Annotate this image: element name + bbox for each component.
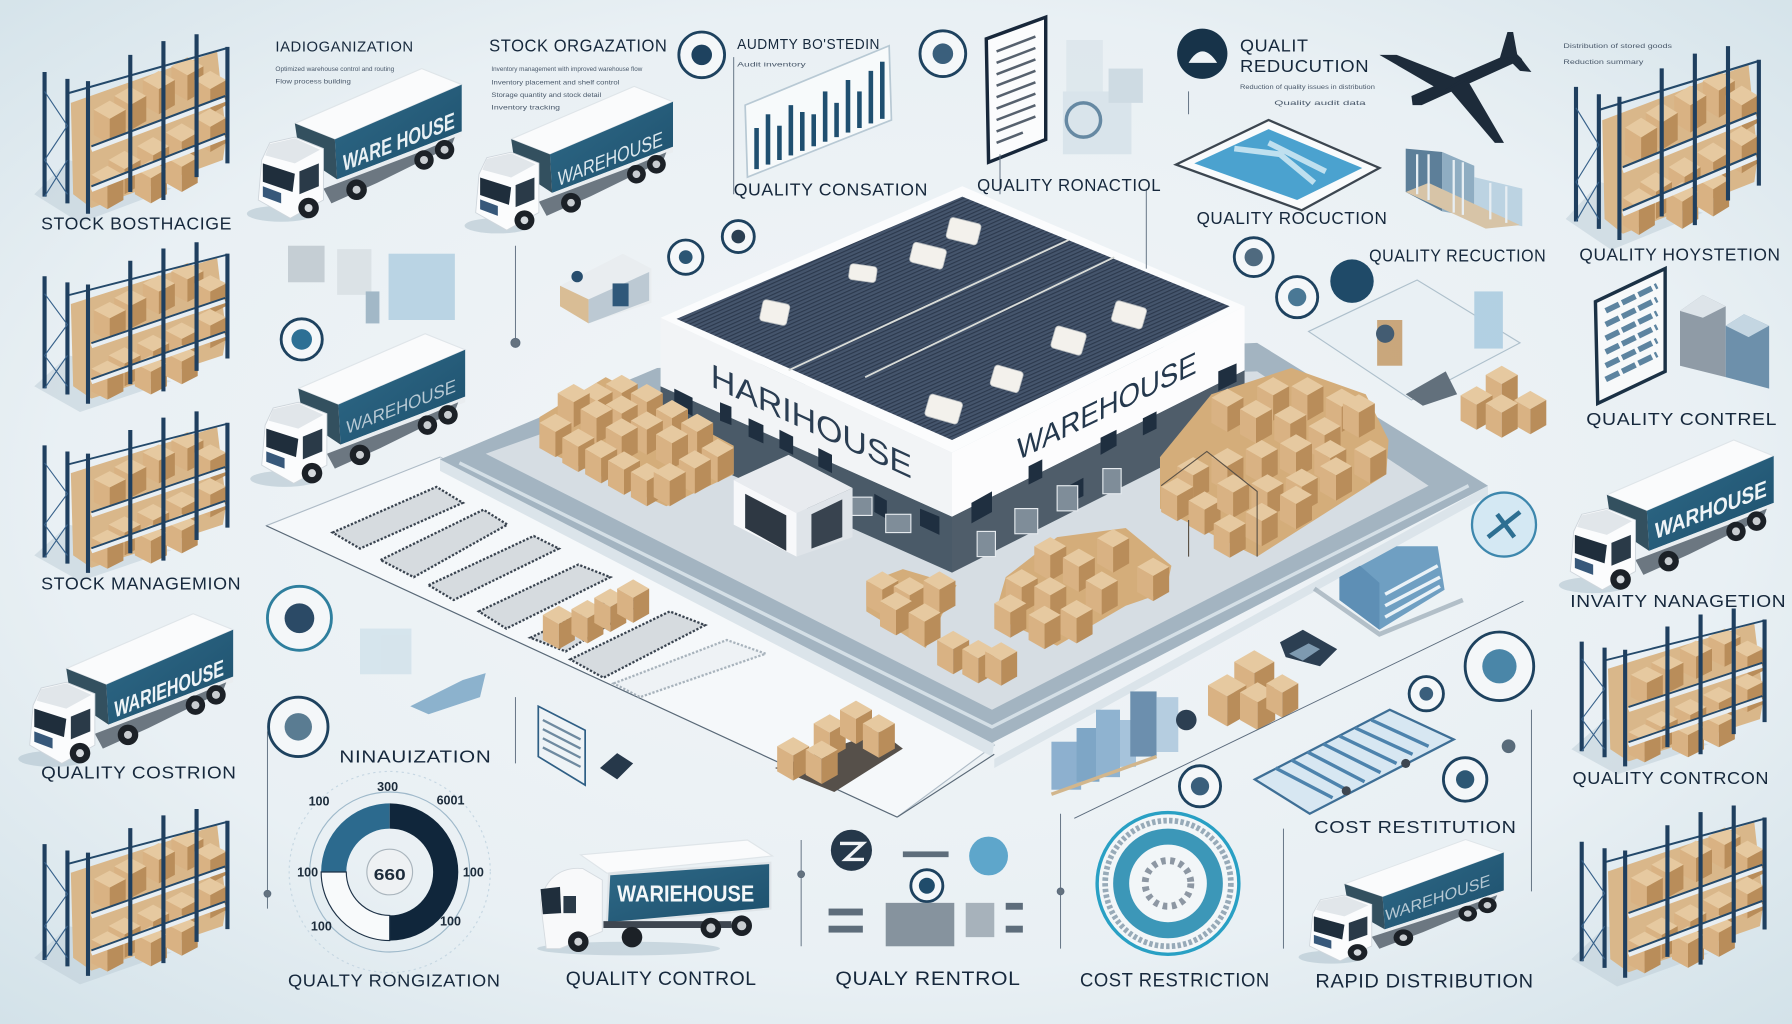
labels: QUALITY COSTRION xyxy=(41,762,237,782)
bar chart panel xyxy=(745,46,891,177)
small descriptive text: Quality audit data xyxy=(1274,100,1366,107)
map tablet xyxy=(1176,120,1379,210)
labels: STOCK BOSTHACIGE xyxy=(41,214,232,234)
sign right wall: WAREHOUSE xyxy=(1017,344,1197,467)
small descriptive text: Reduction summary xyxy=(1563,59,1644,66)
building xyxy=(661,186,1245,573)
small descriptive text: Inventory management with improved warehouse flow xyxy=(491,66,642,73)
circular icons xyxy=(267,31,1534,902)
blue ring badge xyxy=(1097,813,1239,954)
faded equipment panel xyxy=(1063,40,1143,154)
blue plate xyxy=(1255,710,1454,814)
trucks: WAREHOUSE xyxy=(346,376,456,439)
boxes on pallet xyxy=(543,579,903,792)
faded sketch clusters xyxy=(288,246,486,714)
small descriptive text: Inventory tracking xyxy=(491,105,560,112)
labels: QUALITY RECUCTION xyxy=(1369,246,1546,266)
labels: AUDMTY BO'STEDIN xyxy=(737,37,880,53)
skyline chart xyxy=(1406,149,1522,229)
labels: QUALITY HOYSTETION xyxy=(1579,245,1781,265)
labels: STOCK MANAGEMION xyxy=(41,574,241,594)
document small panel xyxy=(538,706,633,785)
trucks: WARIEHOUSE xyxy=(114,656,224,723)
document panel xyxy=(986,17,1046,162)
labels: STOCK ORGAZATION xyxy=(489,35,667,55)
connector lines xyxy=(264,57,1531,949)
faded processing station xyxy=(1309,280,1520,406)
ring chart: 100 xyxy=(463,866,484,880)
labels: INVAITY NANAGETION xyxy=(1570,591,1786,611)
labels: QUALITY ROCUCTION xyxy=(1197,208,1387,228)
labels: QUALTY RONGIZATION xyxy=(288,970,501,990)
labels: QUALITY CONSATION xyxy=(734,179,928,199)
trucks: WAREHOUSE xyxy=(558,127,663,191)
ring chart xyxy=(289,771,490,973)
boxes top right xyxy=(1461,366,1546,438)
info mini panel xyxy=(829,851,1023,946)
tablet dashboard xyxy=(1595,269,1665,403)
dark machine xyxy=(1280,630,1337,666)
trucks: WARHOUSE xyxy=(1655,476,1767,545)
small descriptive text: Audit inventory xyxy=(737,61,807,68)
trucks: WARE HOUSE xyxy=(343,108,455,177)
ring chart: 100 xyxy=(297,866,318,880)
labels: QUALITY CONTREL xyxy=(1586,409,1777,429)
side view truck xyxy=(537,840,773,955)
ring chart: 660 xyxy=(374,867,406,884)
side view truck: WARIEHOUSE xyxy=(617,881,754,907)
small descriptive text: Inventory placement and shelf control xyxy=(491,80,620,87)
roof xyxy=(661,186,1245,453)
lower windows xyxy=(851,469,1121,557)
roof seams xyxy=(789,240,1114,377)
labels: QUALITY CONTRCON xyxy=(1573,768,1769,788)
labels: RAPID DISTRIBUTION xyxy=(1315,970,1534,992)
small descriptive text: Storage quantity and stock detail xyxy=(491,92,602,99)
box stacks front xyxy=(866,528,1171,686)
small descriptive text: Optimized warehouse control and routing xyxy=(275,66,394,73)
labels: COST RESTRICTION xyxy=(1080,969,1270,991)
ring chart: 100 xyxy=(309,795,330,809)
labels: QUALIT xyxy=(1240,35,1309,55)
small descriptive text xyxy=(275,43,1673,112)
conveyor rows xyxy=(333,487,766,697)
ring chart: 6001 xyxy=(437,794,465,808)
upper white wall xyxy=(661,318,952,517)
server cubes xyxy=(1680,295,1769,389)
labels: COST RESTITUTION xyxy=(1314,817,1517,837)
box stack left xyxy=(539,375,734,506)
ring chart: 100 xyxy=(440,915,461,929)
ring chart: 300 xyxy=(377,780,398,794)
filled circular icons xyxy=(285,29,1536,894)
small descriptive text: Reduction of quality issues in distribution xyxy=(1240,84,1375,91)
windows xyxy=(674,363,1237,535)
small descriptive text: Distribution of stored goods xyxy=(1563,43,1673,50)
labels: REDUCUTION xyxy=(1240,56,1369,76)
labels: QUALY RENTROL xyxy=(835,968,1021,990)
blue building bottom right xyxy=(1314,546,1463,634)
roof vents xyxy=(759,217,1147,425)
icon: airplane xyxy=(1379,32,1531,143)
small descriptive text: Flow process building xyxy=(275,78,351,85)
labels: IADIOGANIZATION xyxy=(275,39,414,55)
box stack right xyxy=(1160,368,1389,558)
labels: QUALITY RONACTIOL xyxy=(977,175,1161,195)
boxes bottom right xyxy=(1208,650,1298,730)
ring chart: 100 xyxy=(311,919,332,933)
labels: NINAUIZATION xyxy=(339,746,491,766)
small machine top left xyxy=(560,254,651,323)
sign left wall: HARIHOUSE xyxy=(711,357,912,486)
lower dark wall xyxy=(661,386,952,573)
trucks: WAREHOUSE xyxy=(1385,872,1490,925)
ground platform xyxy=(266,343,1488,817)
loading dock xyxy=(734,455,853,557)
tower group xyxy=(1051,691,1197,794)
labels: QUALITY CONTROL xyxy=(566,968,757,990)
